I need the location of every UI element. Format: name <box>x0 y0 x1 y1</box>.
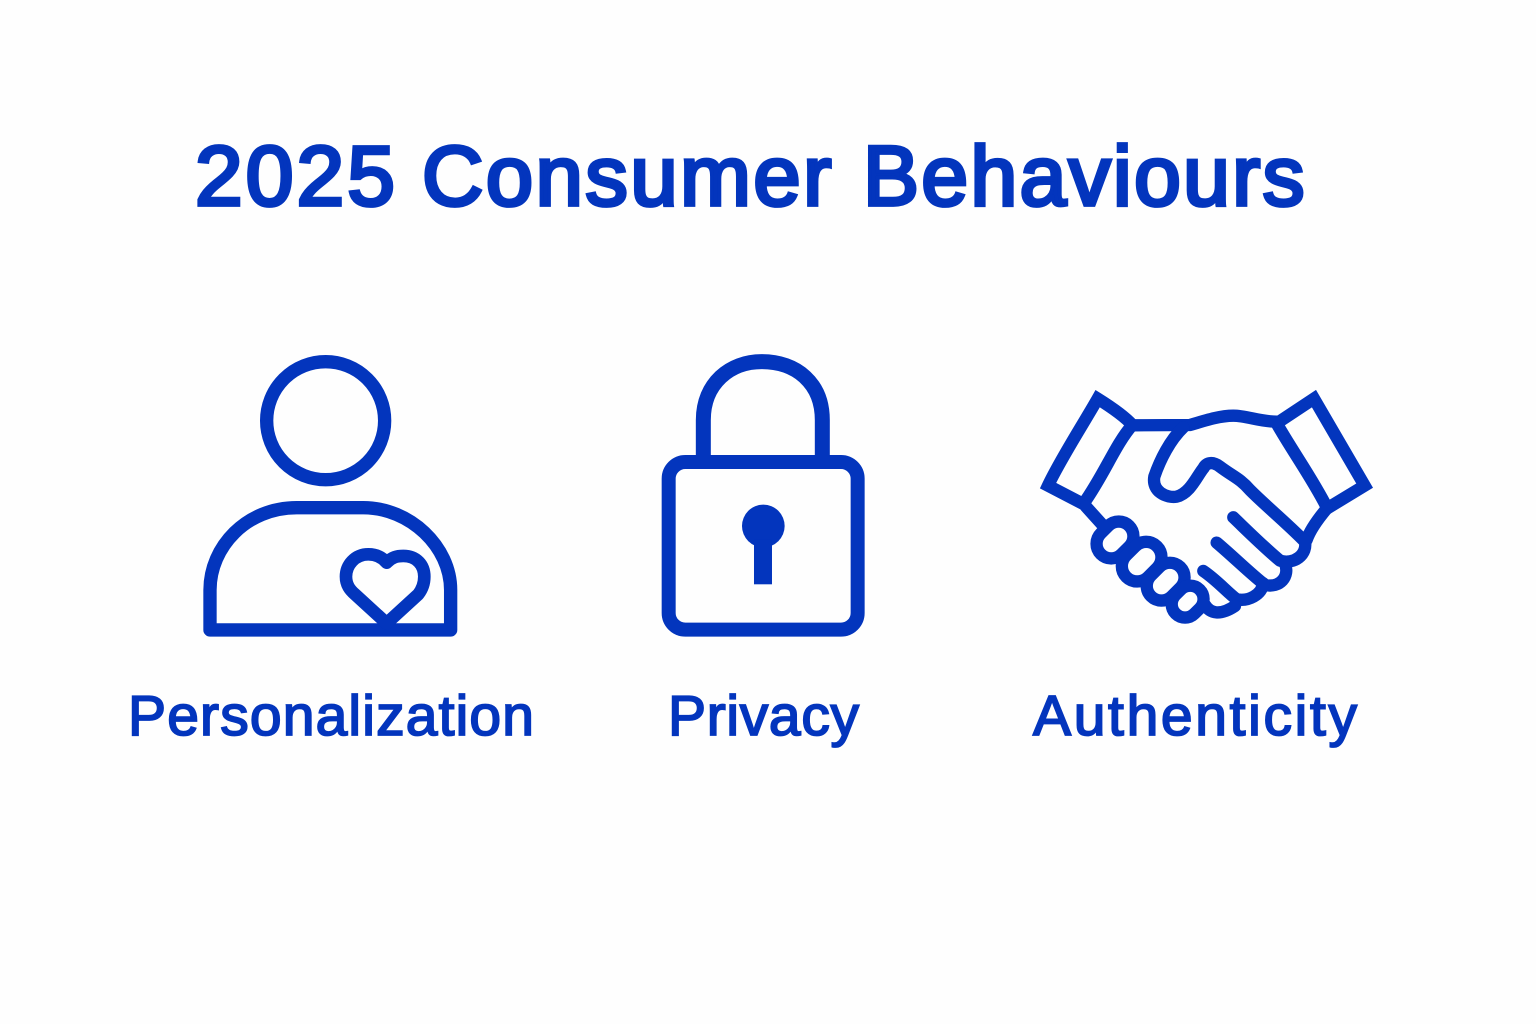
label: Privacy: Privacy <box>668 684 860 748</box>
lock shackle <box>703 362 822 457</box>
right hand fingers <box>1233 517 1305 562</box>
left hand fingers <box>1090 515 1140 564</box>
icon: padlock <box>669 362 858 630</box>
label: Authenticity: Authenticity <box>1033 684 1358 748</box>
person body <box>210 508 451 630</box>
title: Behaviours <box>863 129 1307 223</box>
thumb and upper hand <box>1154 427 1303 540</box>
title: 2025 <box>195 129 398 223</box>
title: Consumer <box>422 129 834 223</box>
icon: handshake <box>1048 399 1365 623</box>
lock body <box>669 462 858 630</box>
keyhole <box>742 505 785 584</box>
icon: person with heart <box>210 362 451 630</box>
left cuff <box>1048 399 1132 504</box>
wrists <box>1086 507 1327 540</box>
title <box>195 129 1307 223</box>
heart <box>346 554 424 623</box>
label: Personalization: Personalization <box>128 684 534 748</box>
top of hands <box>1133 416 1277 425</box>
right cuff <box>1277 399 1365 508</box>
person head <box>267 362 385 480</box>
